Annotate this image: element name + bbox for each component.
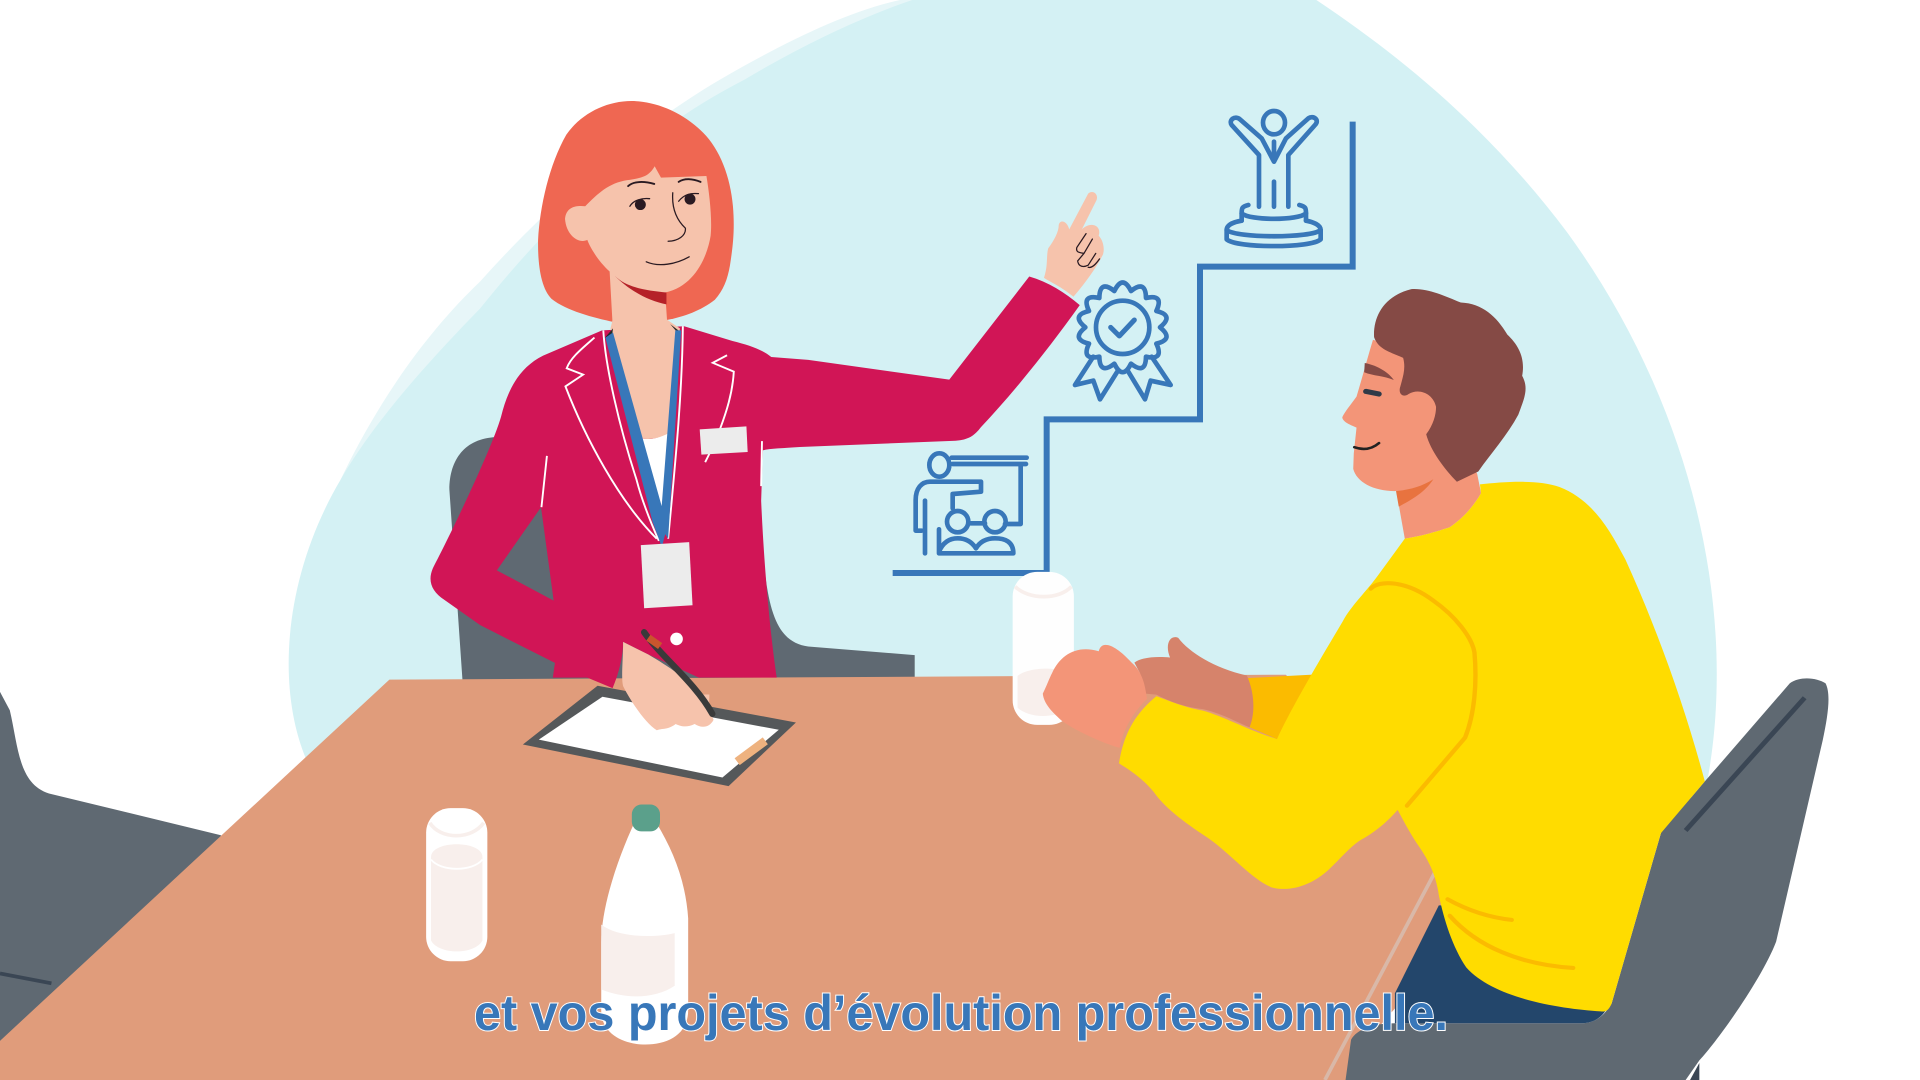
skin V neckline [610,320,680,439]
table [0,675,1457,1080]
glass near man [1013,572,1074,725]
front hand [1043,645,1147,748]
woman's chair [449,437,915,686]
white shirt [638,433,669,526]
left foreground chair [0,692,257,1078]
mouth [1354,443,1379,449]
name badge on lanyard [641,542,693,608]
lanyard [605,330,681,547]
eyebrow [1364,363,1394,380]
collar [605,324,681,338]
sweater seams [1371,583,1573,968]
hair [1374,289,1526,482]
name tag [700,426,748,455]
facial features [628,179,701,265]
undershirt shade [1247,674,1315,739]
background: light blue blob [289,0,1717,980]
staircase with career icons [893,111,1353,573]
neck shadow [1396,479,1433,507]
man and his chair [1043,289,1828,1080]
pen [644,632,712,714]
chair line [1686,698,1805,831]
icon: training class [916,453,1027,553]
water bottle [601,804,688,1044]
raised hand [1044,192,1104,297]
subtitle: et vos projets d’évolution professionnelle. [474,985,1448,1041]
glass on table [426,808,487,961]
gap between arm and body [497,507,554,601]
hair [538,101,734,322]
clipboard and paper [523,686,796,786]
eye [1366,391,1379,394]
woman [431,101,1104,730]
trousers [1395,905,1610,1023]
chair leg [1690,1063,1699,1080]
neck shadow [615,276,666,304]
jacket [431,277,1080,688]
chair [1346,678,1828,1080]
face and neck [565,166,711,324]
jacket button [670,633,683,645]
icon: certification rosette [1075,282,1171,399]
face [1342,340,1477,491]
finger lines [1077,234,1100,267]
icon: person on podium [1227,111,1321,246]
writing hand [622,642,714,730]
back hand [1134,637,1253,727]
stair line [893,122,1353,573]
jacket white outlines [541,326,762,541]
neck [1396,435,1481,539]
sweater [1119,482,1705,1012]
